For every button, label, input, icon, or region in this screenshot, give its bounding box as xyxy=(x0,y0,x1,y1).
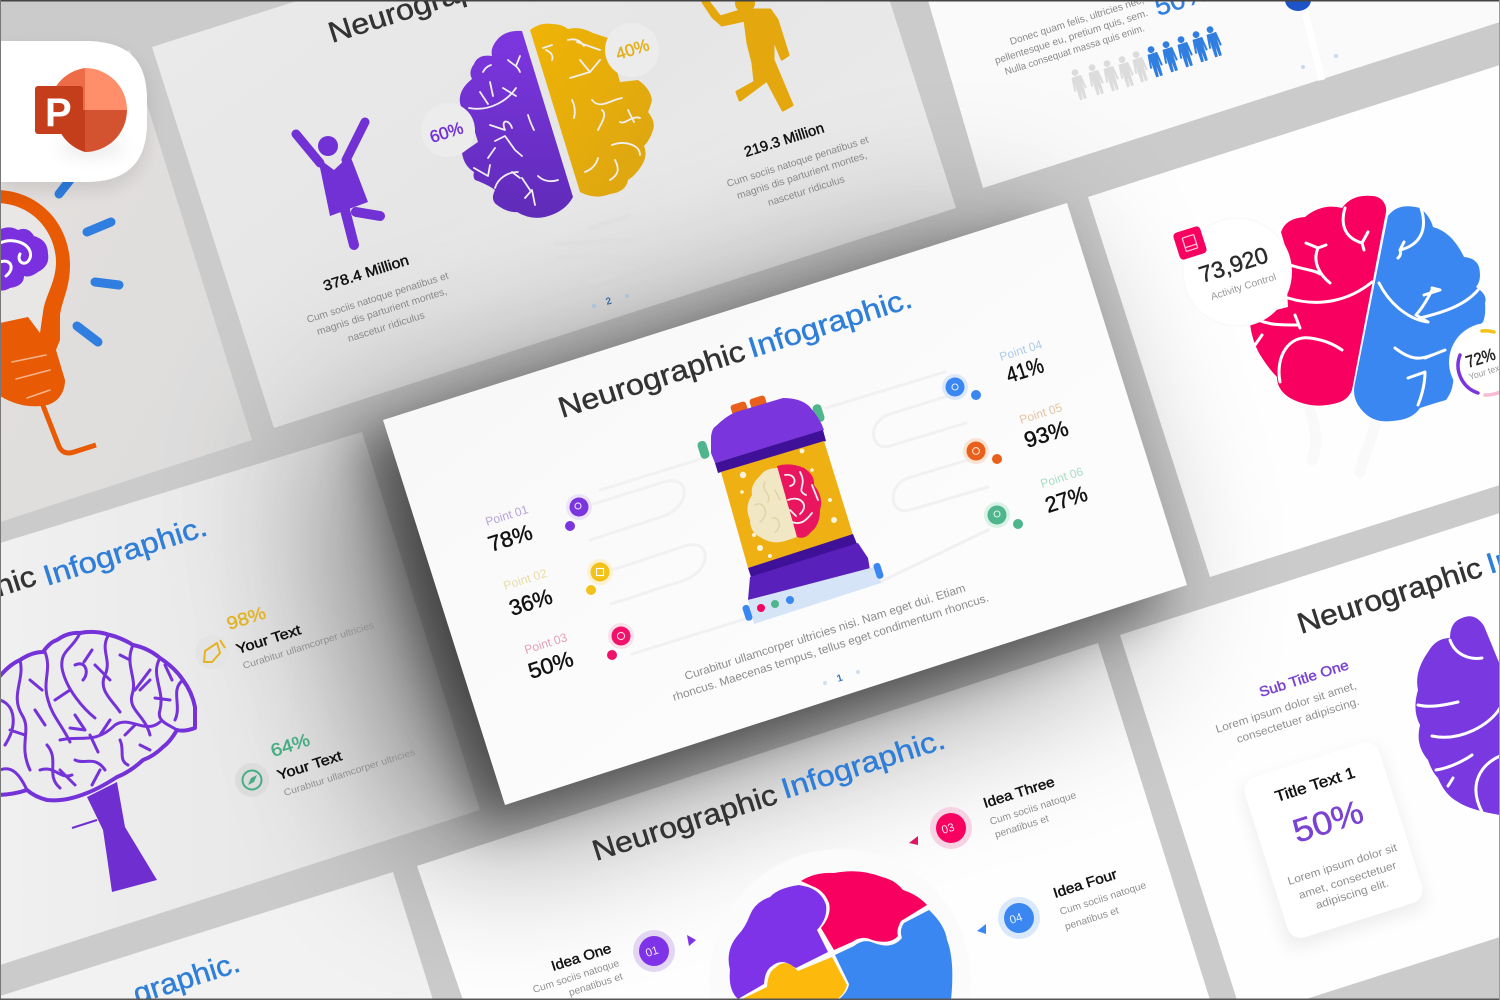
stat: 219.3 Million: 219.3 Million xyxy=(742,120,826,161)
stat: 219.3 Million: Cum sociis natoque penatibus et xyxy=(726,135,870,190)
item: 98% Your Text: 98% xyxy=(224,603,268,634)
point 02: Point 02 xyxy=(502,566,549,593)
beige hemisphere xyxy=(747,468,797,542)
panel: two hemispheres slide xyxy=(296,0,870,345)
icon: ghost bulb base xyxy=(556,216,634,282)
point 04: 41% xyxy=(1003,352,1047,388)
point 01: Point 01 xyxy=(484,502,530,529)
callout: 40% xyxy=(605,23,659,77)
point 03: 50% xyxy=(525,646,576,684)
panel: pink blue brain slide xyxy=(1172,196,1500,472)
icon: puzzle brain xyxy=(709,849,971,1000)
stat: 378.4 Million: 378.4 Million xyxy=(321,253,411,295)
item: Idea Three: 03 xyxy=(940,822,956,837)
panel: center slide xyxy=(383,203,1187,805)
icon: grey people xyxy=(1068,49,1151,101)
icon: logo circle xyxy=(35,68,127,154)
status lights xyxy=(757,596,794,612)
item: Idea Three: Idea Three xyxy=(981,773,1057,811)
item: 64% Your Text: Curabitur ullamcorper ultricies xyxy=(283,747,417,799)
heading: Infographic. xyxy=(744,283,916,365)
point 04 xyxy=(942,337,1047,400)
point 04: Point 04 xyxy=(998,337,1044,364)
text block: pellentesque eu, pretium quis, sem. xyxy=(994,8,1149,67)
point 02: 36% xyxy=(506,584,555,621)
point 06: Point 06 xyxy=(1039,464,1085,491)
item: Idea One: Cum sociis natoque xyxy=(532,958,621,996)
heading: Infographic. xyxy=(777,724,949,806)
point 01 xyxy=(484,494,592,557)
panel: bulb slide xyxy=(0,180,119,453)
pagination 2: 2 xyxy=(605,296,614,308)
panel: people stat slide xyxy=(994,0,1338,101)
dark band xyxy=(715,430,826,473)
icon: purple brain xyxy=(1415,616,1500,815)
item: 64% Your Text: 64% xyxy=(268,730,312,761)
heading xyxy=(1293,499,1500,641)
callout: 60%: 60% xyxy=(427,118,466,147)
stat: 219.3 Million: magnis dis parturient montes, xyxy=(736,150,869,202)
panel: sub title card slide xyxy=(1214,499,1500,950)
item: Idea Three: penatibus et xyxy=(994,813,1050,841)
connector rails xyxy=(590,372,988,654)
dark band lower xyxy=(748,534,857,577)
icon: ghost brain stem xyxy=(1310,410,1375,472)
card: Title Text 1: 50% xyxy=(1288,793,1368,850)
callout: 72% ring xyxy=(1449,323,1500,401)
item: Idea Three xyxy=(909,773,1078,849)
icon: tree brain xyxy=(0,632,195,892)
card: Title Text 1 xyxy=(1241,739,1427,950)
item: Idea Four: Cum sociis natoque xyxy=(1059,880,1148,918)
point 05: 93% xyxy=(1021,415,1071,453)
heading: Neurographic xyxy=(1293,552,1486,641)
pagination 1 xyxy=(823,670,860,685)
point 06: 27% xyxy=(1042,481,1090,518)
callout: 40%: 40% xyxy=(613,35,652,64)
badge: PowerPoint logo xyxy=(0,41,147,190)
icon: purple brain in bulb xyxy=(0,227,48,291)
icon: pink book badge xyxy=(1172,225,1208,261)
callout: 73,920: 73,920 xyxy=(1196,242,1271,288)
point 05: Point 05 xyxy=(1018,400,1064,427)
heading xyxy=(554,283,916,425)
point 02 xyxy=(502,559,613,621)
pink hemisphere xyxy=(777,464,821,538)
purple base xyxy=(748,543,870,600)
subtitle block: Sub Title One xyxy=(1257,656,1351,700)
item: Idea Four xyxy=(977,866,1148,939)
item: Idea Four: 04 xyxy=(1008,911,1025,927)
icon: yellow man xyxy=(703,0,792,110)
pagination 2 xyxy=(592,294,629,308)
subtitle block: consectetuer adipiscing. xyxy=(1235,696,1361,746)
icon: blue pin head xyxy=(1285,0,1338,80)
panel: puzzle brain slide xyxy=(532,724,1148,1000)
card: Title Text 1: amet, consectetuer xyxy=(1297,859,1398,902)
purple dome xyxy=(711,398,824,463)
pagination 1: 1 xyxy=(836,673,845,685)
card: Title Text 1: adipiscing elit. xyxy=(1314,877,1390,912)
card: Title Text 1: Lorem ipsum dolor sit xyxy=(1286,842,1399,888)
heading: Infographic. xyxy=(39,511,211,593)
body text: Curabitur ullamcorper ultricies nisi. Nam eget dui. Etiam xyxy=(683,583,967,683)
item: 98% Your Text: Your Text xyxy=(234,621,303,657)
icon: pink blue brain xyxy=(1250,196,1486,421)
item: Idea One: Idea One xyxy=(549,940,613,974)
stat: 378.4 Million: Cum sociis natoque penatibus et xyxy=(306,271,450,326)
slide surface xyxy=(383,203,1187,805)
item: Idea One: penatibus et xyxy=(568,971,624,999)
panel: tree brain slide xyxy=(0,511,417,892)
heading: Neurographic xyxy=(554,336,749,425)
item: 64% Your Text: Your Text xyxy=(275,747,344,783)
yellow chamber xyxy=(721,441,853,568)
item: Idea Four: Idea Four xyxy=(1051,866,1119,901)
subtitle block xyxy=(1214,656,1361,746)
heading xyxy=(0,511,211,650)
item: Idea One xyxy=(532,930,696,999)
icon: purple jumping woman xyxy=(296,122,380,245)
point 05 xyxy=(963,400,1071,464)
icon: purple yellow brain xyxy=(460,24,654,218)
point 06 xyxy=(984,464,1090,529)
stat: 219.3 Million: nascetur ridiculus xyxy=(767,174,846,209)
card: Title Text 1: Title Text 1 xyxy=(1273,765,1357,806)
icon: brain jar machine xyxy=(696,395,884,624)
heading xyxy=(588,724,949,868)
stat: 378.4 Million xyxy=(306,253,450,345)
item: Idea Three: Cum sociis natoque xyxy=(989,790,1078,828)
point 03: Point 03 xyxy=(523,630,569,657)
icon: orange light bulb xyxy=(0,190,96,453)
brain folds xyxy=(785,472,818,523)
callout: 73,920 xyxy=(1172,218,1291,326)
pale plinth xyxy=(748,566,881,624)
item: 64% Your Text xyxy=(235,730,417,799)
heading: Neurographic xyxy=(588,779,781,868)
item: 98% Your Text xyxy=(195,603,376,672)
point 01: 78% xyxy=(485,519,535,557)
stat: 378.4 Million: nascetur ridiculus xyxy=(347,310,426,345)
icon: blue rays xyxy=(59,180,119,342)
item: Idea Four: penatibus et xyxy=(1064,905,1120,933)
callout: 73,920: Activity Control xyxy=(1210,272,1278,303)
stat: 219.3 Million xyxy=(726,120,870,209)
knobs xyxy=(696,395,826,460)
callout: 60% xyxy=(421,103,475,157)
item: Idea One: 01 xyxy=(644,945,660,960)
text block: Nulla consequat massa quis enim. xyxy=(1004,23,1146,78)
icon: blue people xyxy=(1144,24,1225,78)
blue caps xyxy=(873,562,884,580)
subtitle block: Lorem ipsum dolor sit amet, xyxy=(1214,680,1358,736)
point 03 xyxy=(523,623,634,684)
icon: logo circle: P xyxy=(45,91,72,135)
stat: 378.4 Million: magnis dis parturient montes, xyxy=(316,286,449,338)
body text: rhoncus. Maecenas tempus, tellus eget condimentum rhoncus. xyxy=(671,592,990,704)
item: 98% Your Text: Curabitur ullamcorper ultricies xyxy=(242,620,376,672)
chamber bubbles xyxy=(740,449,837,558)
